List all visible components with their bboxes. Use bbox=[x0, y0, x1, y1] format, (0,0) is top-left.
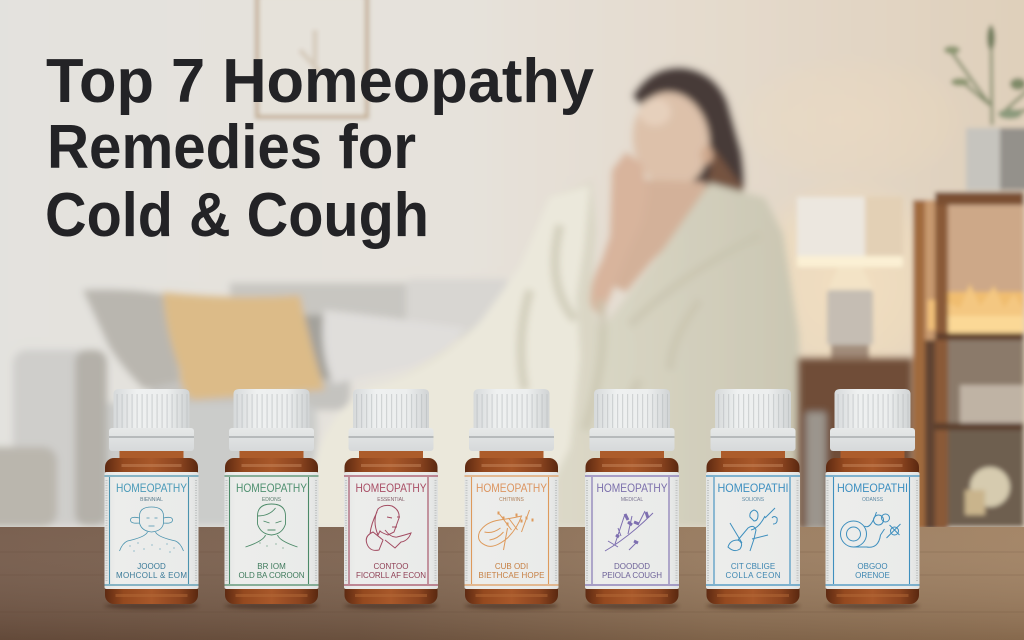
bottle 6: sky-blue label bbox=[706, 389, 800, 610]
blanket bbox=[310, 181, 803, 527]
bottle 2: green label: EDIONS bbox=[262, 497, 282, 503]
bottle 2: green label: BR IOM bbox=[257, 562, 286, 571]
woman wrapped in a blanket bbox=[310, 68, 803, 527]
bottle 4: orange label: HOMEOPATHY bbox=[476, 481, 547, 495]
bottle 1: blue label: HOMEOPATHY bbox=[116, 481, 187, 495]
title bbox=[45, 47, 595, 250]
bottle 1: blue label: JOOOD bbox=[137, 562, 166, 571]
title: Top 7 Homeopathy bbox=[46, 47, 595, 116]
bottle 7: blue label: ODANSS bbox=[862, 497, 884, 503]
bottle 6: sky-blue label: COLLA CEON bbox=[726, 571, 781, 580]
bottle 3: crimson label: HOMEOPATHY bbox=[356, 481, 426, 495]
bottle 7: blue label: ORENOE bbox=[855, 571, 890, 580]
bottle 6: sky-blue label: HOMEOPATHI bbox=[718, 481, 788, 495]
bottle 4: orange label: CHITWINS bbox=[499, 497, 525, 503]
bottle 4: orange label: CUB ODI bbox=[495, 562, 528, 571]
face bbox=[627, 87, 715, 193]
bottle 7: blue label: OBGOO bbox=[857, 562, 888, 571]
wall picture frame bbox=[257, 0, 367, 117]
bottle 1: blue label: BIENNIAL bbox=[140, 497, 163, 503]
wooden table bbox=[0, 527, 1024, 640]
bottle 2: green label: HOMEOPATHY bbox=[236, 481, 307, 495]
bottle 4: orange label: BIETHCAE HOPE bbox=[478, 571, 544, 580]
bottle 2: green label: OLD BA COROON bbox=[238, 571, 305, 580]
bottle 6: sky-blue label: CIT CBLIGE bbox=[731, 562, 775, 571]
bottle 3: crimson label bbox=[344, 389, 438, 610]
table lamp bbox=[797, 197, 903, 359]
title: Cold & Cough bbox=[45, 181, 429, 250]
title: Remedies for bbox=[47, 113, 416, 182]
bottle 3: crimson label: FICORLL AF ECON bbox=[356, 571, 426, 580]
bottle 3: crimson label: ESSENTIAL bbox=[377, 497, 405, 503]
neck and chest bbox=[606, 180, 711, 292]
bottle 4: orange label bbox=[464, 389, 558, 610]
hair bbox=[633, 68, 744, 200]
potted plant bbox=[944, 25, 1024, 190]
bottle 5: purple label: HOMEOPATHY bbox=[596, 481, 668, 495]
bottle 5: purple label: DOODOD bbox=[614, 562, 650, 571]
bottle 5: purple label bbox=[585, 389, 679, 610]
bottle 7: blue label bbox=[826, 389, 920, 610]
side table bbox=[798, 358, 913, 530]
bottle 2: green label bbox=[224, 389, 318, 610]
bottle 3: crimson label: CONTOO bbox=[374, 562, 408, 571]
bottle 1: blue label bbox=[104, 389, 198, 610]
hand and arm bbox=[588, 152, 648, 316]
bottle 6: sky-blue label: SOLIONS bbox=[742, 497, 765, 503]
shelf unit bbox=[913, 192, 1024, 530]
bottle 5: purple label: PEIOLA COUGH bbox=[602, 571, 662, 580]
bottle 5: purple label: MEDICAL bbox=[621, 497, 643, 503]
bottle 1: blue label: MOHCOLL & EOM bbox=[116, 571, 187, 580]
bottle 7: blue label: HOMEOPATHI bbox=[837, 481, 908, 495]
sofa bbox=[0, 279, 510, 527]
